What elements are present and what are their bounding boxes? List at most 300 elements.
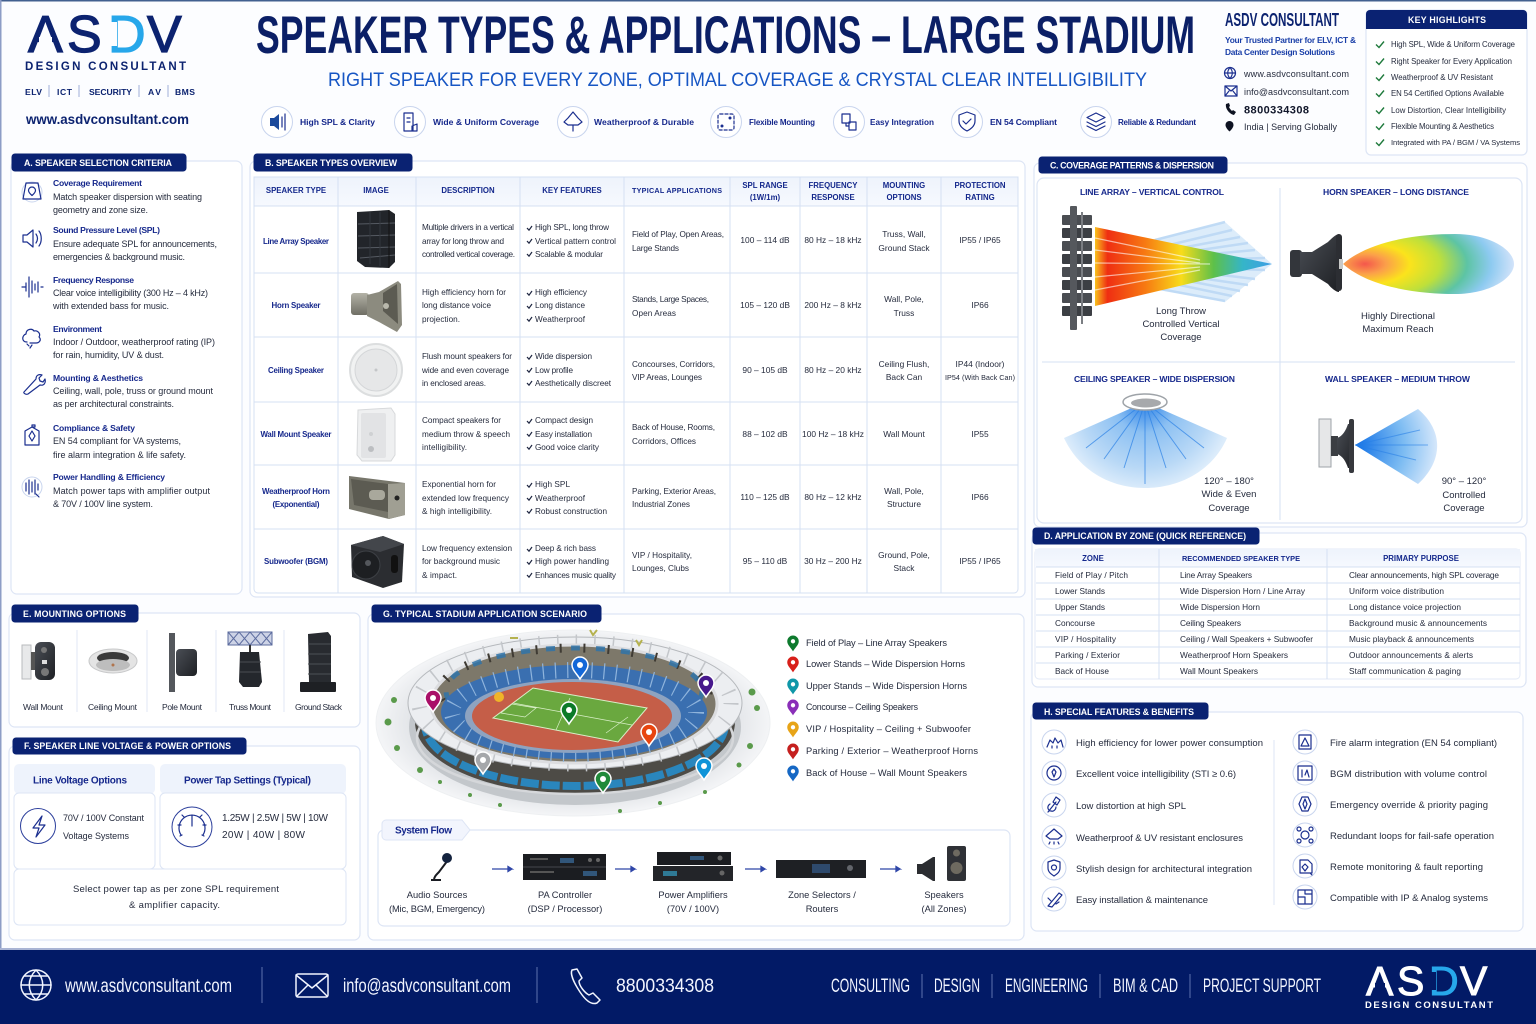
row: horn speaker: Weatherproof — [535, 315, 586, 324]
image: line array side view — [1062, 206, 1092, 330]
right feature list: Fire alarm integration (EN 54 compliant) — [1330, 738, 1497, 749]
footer: services: BIM & CAD — [1113, 976, 1178, 997]
panel: key highlights: EN 54 Certified Options Available — [1391, 89, 1504, 98]
panel: B speaker types overview — [250, 154, 1025, 597]
row: horn speaker: 105 – 120 dB — [740, 300, 790, 310]
row: line array speaker: 100 – 114 dB — [740, 235, 790, 245]
mount: truss: Truss Mount — [229, 702, 272, 712]
header logo: SECURITY — [89, 87, 132, 97]
row: weatherproof horn: Industrial Zones — [632, 500, 690, 509]
pattern: ceiling — [1064, 374, 1256, 514]
flow: zone selectors: Routers — [806, 904, 839, 914]
row: line array speaker: Large Stands — [632, 244, 679, 253]
criterion: environment: Indoor / Outdoor, weatherproof rating (IP) — [53, 337, 215, 347]
footer: services — [831, 974, 1321, 998]
sub-card: power tap — [160, 764, 346, 869]
criterion: mounting: Mounting & Aesthetics — [53, 373, 143, 383]
criterion: compliance: EN 54 compliant for VA systems, — [53, 436, 181, 446]
table: zones: VIP / Hospitality — [1055, 634, 1117, 644]
row: ceiling speaker: Aesthetically discreet — [535, 379, 612, 388]
table: zones: Uniform voice distribution — [1349, 586, 1444, 596]
row: subwoofer: Deep & rich bass — [535, 544, 596, 553]
criterion: coverage: Coverage Requirement — [53, 178, 142, 188]
table: zones: Lower Stands — [1055, 586, 1105, 596]
flow: power amplifiers — [653, 852, 733, 914]
header logo: BMS — [175, 87, 195, 97]
table: zones: Music playback & announcements — [1349, 634, 1474, 644]
row: horn speaker: High efficiency — [535, 288, 588, 297]
row: line array speaker: Scalable & modular — [535, 250, 603, 259]
panel: key highlights: Low Distortion, Clear Intelligibility — [1391, 106, 1506, 115]
header logo: ASDV — [28, 6, 182, 64]
panel: C coverage patterns: C. COVERAGE PATTERNS & DISPERSION — [1050, 160, 1214, 170]
row: ceiling speaker: 90 – 105 dB — [742, 365, 788, 375]
row: wall mount speaker: Compact design — [535, 416, 593, 425]
row: wall mount speaker: IP55 — [971, 429, 989, 439]
company contact block: 8800334308 — [1244, 104, 1309, 116]
right feature list: Emergency override & priority paging — [1330, 800, 1488, 811]
company contact block: info@asdvconsultant.com — [1244, 87, 1349, 97]
criterion: compliance — [25, 423, 186, 460]
pattern: horn: HORN SPEAKER – LONG DISTANCE — [1323, 187, 1469, 197]
header logo: DESIGN CONSULTANT — [25, 61, 186, 73]
panel: key highlights: Weatherproof & UV Resistant — [1391, 73, 1494, 82]
criterion: power — [22, 472, 210, 509]
row: weatherproof horn: Weatherproof — [535, 494, 586, 503]
row: ceiling speaker: Wide dispersion — [535, 352, 592, 361]
criterion: compliance: Compliance & Safety — [53, 423, 135, 433]
flow: power amplifiers: Power Amplifiers — [658, 890, 728, 900]
row: ceiling speaker — [268, 344, 1015, 396]
system flow — [378, 820, 1010, 926]
flow: zone selectors — [776, 860, 866, 914]
row: wall mount speaker: Corridors, Offices — [632, 437, 696, 446]
row: subwoofer: Stack — [894, 563, 915, 573]
panel: G typical stadium application: G. TYPICAL STADIUM APPLICATION SCENARIO — [383, 609, 587, 619]
footer — [0, 948, 1536, 1024]
left feature list: Excellent voice intelligibility (STI ≥ 0.6) — [1076, 769, 1236, 780]
row: ceiling speaker: VIP Areas, Lounges — [632, 373, 702, 382]
mount: ground: Ground Stack — [295, 702, 343, 712]
feature icon row: Flexible Mounting — [749, 118, 815, 127]
footer: services: DESIGN — [934, 976, 980, 997]
pattern: ceiling: Wide & Even — [1202, 489, 1256, 500]
table: zones: Ceiling Speakers — [1180, 618, 1241, 628]
row: horn speaker: Open Areas — [632, 309, 676, 318]
row: ceiling speaker: Back Can — [886, 372, 922, 382]
table: zones: Staff communication & paging — [1349, 666, 1461, 676]
row: line array speaker: Multiple drivers in a vertical — [422, 223, 514, 232]
flow: audio sources — [389, 853, 485, 914]
row: subwoofer: Ground, Pole, — [878, 550, 930, 560]
table: zones: Field of Play / Pitch — [1055, 570, 1128, 580]
table: zones: Parking / Exterior — [1055, 650, 1120, 660]
table header: KEY FEATURES — [542, 186, 602, 195]
row: horn speaker: Stands, Large Spaces, — [632, 295, 709, 304]
criterion: environment: for rain, humidity, UV & dust. — [53, 350, 164, 360]
panel: key highlights: KEY HIGHLIGHTS — [1408, 15, 1486, 25]
row: ceiling speaker: IP44 (Indoor) — [956, 359, 1005, 369]
row: weatherproof horn: Parking, Exterior Areas, — [632, 487, 716, 496]
criterion: frequency: with extended bass for music. — [52, 301, 169, 311]
legend: Lower Stands – Wide Dispersion Horns — [806, 659, 965, 669]
row: line array speaker: array for long throw and — [422, 237, 504, 246]
sub-card: line voltage — [14, 764, 155, 869]
row: line array speaker: IP55 / IP65 — [959, 235, 1001, 245]
footer: logo: DESIGN CONSULTANT — [1365, 1000, 1493, 1011]
footer: website: www.asdvconsultant.com — [64, 976, 232, 997]
row: ceiling speaker: Ceiling Flush, — [879, 359, 929, 369]
table: zones: Wide Dispersion Horn — [1180, 602, 1260, 612]
right feature list: Remote monitoring & fault reporting — [1330, 862, 1483, 873]
row: subwoofer: for background music — [422, 557, 500, 566]
arrow — [615, 866, 635, 872]
panel: D application by zone — [1032, 528, 1526, 687]
criterion: mounting — [24, 373, 213, 409]
criterion: coverage: geometry and zone size. — [53, 205, 148, 215]
row: weatherproof horn: (Exponential) — [272, 500, 320, 509]
table: zones: Ceiling / Wall Speakers + Subwoofer — [1180, 634, 1313, 644]
table: zones: Clear announcements, high SPL coverage — [1349, 570, 1499, 580]
table: zones: Line Array Speakers — [1180, 570, 1252, 580]
row: subwoofer: Enhances music quality — [535, 571, 617, 580]
row: ceiling speaker: 80 Hz – 20 kHz — [804, 365, 862, 375]
footer: phone: 8800334308 — [616, 976, 714, 997]
table: zones: Long distance voice projection — [1349, 602, 1461, 612]
row: wall mount speaker: medium throw & speech — [422, 430, 510, 439]
row: line array speaker: controlled vertical coverage. — [422, 250, 515, 259]
flow: speakers: (All Zones) — [922, 904, 966, 914]
company contact block: ASDV CONSULTANT — [1225, 10, 1339, 30]
footer: phone — [571, 969, 714, 1004]
legend — [787, 636, 978, 781]
row: line array speaker: Field of Play, Open Areas, — [632, 230, 724, 239]
table header: OPTIONS — [886, 193, 922, 202]
legend: VIP / Hospitality – Ceiling + Subwoofer — [806, 724, 971, 734]
row: weatherproof horn: Robust construction — [535, 507, 607, 516]
row: weatherproof horn: Structure — [887, 499, 921, 509]
pattern: ceiling: CEILING SPEAKER – WIDE DISPERSION — [1074, 374, 1235, 384]
system flow: System Flow — [395, 826, 452, 836]
row: ceiling speaker: Ceiling Speaker — [268, 366, 324, 375]
criterion: power: Power Handling & Efficiency — [53, 472, 165, 482]
row: ceiling speaker: Concourses, Corridors, — [632, 360, 715, 369]
pattern: wall: Controlled — [1442, 490, 1486, 501]
panel: key highlights: High SPL, Wide & Uniform Coverage — [1391, 40, 1515, 49]
mount: ceiling: Ceiling Mount — [88, 702, 138, 712]
panel: key highlights: Right Speaker for Every Application — [1391, 57, 1512, 66]
criterion: environment — [23, 324, 215, 360]
criterion: SPL: Sound Pressure Level (SPL) — [53, 225, 160, 235]
illustration: stadium — [376, 630, 770, 816]
header logo: ELV — [25, 87, 42, 97]
panel: C coverage patterns — [1034, 157, 1527, 527]
company contact block: Your Trusted Partner for ELV, ICT & — [1225, 35, 1356, 45]
company contact block: Data Center Design Solutions — [1225, 47, 1335, 57]
pattern: line array — [1062, 187, 1272, 343]
pattern: wall: WALL SPEAKER – MEDIUM THROW — [1325, 374, 1471, 384]
arrow — [745, 866, 765, 872]
row: line array speaker: Vertical pattern control — [535, 237, 616, 246]
company contact block: www.asdvconsultant.com — [1243, 69, 1349, 79]
sub-card: line voltage: Voltage Systems — [63, 831, 130, 841]
table header: SPL RANGE — [742, 181, 788, 190]
criterion: mounting: as per architectural constraints. — [53, 399, 174, 409]
pattern: line array: Long Throw — [1156, 306, 1206, 317]
row: ceiling speaker: in enclosed areas. — [422, 379, 486, 388]
feature icon row: Reliable & Redundant — [1118, 118, 1196, 127]
criterion: frequency — [22, 275, 208, 311]
row: weatherproof horn: extended low frequency — [422, 494, 510, 503]
row: weatherproof horn: Wall, Pole, — [884, 486, 924, 496]
flow: PA controller: (DSP / Processor) — [528, 904, 602, 914]
sub-card: power tap: 20W | 40W | 80W — [222, 830, 306, 841]
left feature list: Easy installation & maintenance — [1076, 895, 1208, 906]
flow: speakers — [917, 846, 966, 914]
row: horn speaker: projection. — [422, 315, 460, 324]
pattern: ceiling: Coverage — [1208, 503, 1250, 514]
legend: Back of House – Wall Mount Speakers — [806, 768, 967, 778]
right feature list — [1293, 730, 1497, 909]
pattern: horn: Highly Directional — [1361, 311, 1435, 322]
table header: TYPICAL APPLICATIONS — [632, 186, 722, 195]
legend: Parking / Exterior – Weatherproof Horns — [806, 746, 978, 756]
criterion: coverage: Match speaker dispersion with seating — [53, 192, 202, 202]
pins — [425, 657, 714, 793]
row: ceiling speaker: Flush mount speakers for — [422, 352, 512, 361]
panel: E mounting options: E. MOUNTING OPTIONS — [23, 609, 126, 619]
panel: A speaker selection criteria — [11, 154, 242, 594]
mount: ceiling — [88, 649, 138, 712]
feature icon row: EN 54 Compliant — [990, 117, 1057, 127]
row: line array speaker: Line Array Speaker — [263, 237, 329, 246]
mount: pole: Pole Mount — [162, 702, 203, 712]
row: weatherproof horn: Exponential horn for — [422, 480, 496, 489]
row: horn speaker: long distance voice — [422, 301, 491, 310]
note: & amplifier capacity. — [129, 900, 220, 911]
row: line array speaker: 80 Hz – 18 kHz — [804, 235, 862, 245]
right feature list: Redundant loops for fail-safe operation — [1330, 831, 1494, 842]
table header: FREQUENCY — [809, 181, 858, 190]
row: horn speaker: Long distance — [535, 301, 585, 310]
table: zones — [1035, 549, 1520, 679]
image: exponential horn — [349, 476, 405, 519]
image: ceiling speaker — [350, 344, 402, 396]
pattern: wall — [1319, 374, 1486, 514]
row: subwoofer: High power handling — [535, 557, 609, 566]
row: wall mount speaker: intelligibility. — [422, 443, 467, 452]
mount: truss — [228, 632, 272, 712]
image: ceiling ring — [1123, 394, 1167, 410]
criterion: compliance: fire alarm integration & life safety. — [53, 450, 186, 460]
row: weatherproof horn: 80 Hz – 12 kHz — [804, 492, 862, 502]
row: line array speaker: Ground Stack — [878, 243, 930, 253]
footer: website — [21, 970, 232, 1000]
table: zones: Concourse — [1055, 618, 1095, 628]
row: wall mount speaker: Back of House, Rooms, — [632, 423, 715, 432]
flow: audio sources: Audio Sources — [407, 890, 468, 900]
row: horn speaker: IP66 — [971, 300, 989, 310]
criterion: coverage — [22, 178, 202, 215]
legend: Upper Stands – Wide Dispersion Horns — [806, 681, 967, 691]
flow: power amplifiers: (70V / 100V) — [667, 904, 719, 914]
image: subwoofer — [351, 536, 404, 588]
table: zones: Wide Dispersion Horn / Line Array — [1180, 586, 1306, 596]
feature icon row: Easy Integration — [870, 118, 934, 127]
footer: services: ENGINEERING — [1005, 976, 1088, 997]
note: Select power tap as per zone SPL requirement — [73, 884, 279, 895]
flow: PA controller — [523, 854, 606, 914]
flow: speakers: Speakers — [924, 890, 964, 900]
pattern: ceiling: 120° – 180° — [1204, 476, 1254, 487]
row: line array speaker: High SPL, long throw — [535, 223, 609, 232]
image: horn — [351, 281, 402, 332]
row: ceiling speaker: wide and even coverage — [421, 366, 509, 375]
footer: email: info@asdvconsultant.com — [343, 976, 511, 997]
criterion: power: Match power taps with amplifier output — [53, 486, 210, 496]
panel: B speaker types overview: B. SPEAKER TYPES OVERVIEW — [265, 158, 398, 168]
row: horn speaker: Wall, Pole, — [884, 294, 924, 304]
table: speaker types — [254, 177, 1018, 593]
table: zones: Outdoor announcements & alerts — [1349, 650, 1473, 660]
table: zones: Back of House — [1055, 666, 1109, 676]
flow: zone selectors: Zone Selectors / — [788, 890, 856, 900]
row: subwoofer: Lounges, Clubs — [632, 564, 689, 573]
pattern: line array: Controlled Vertical — [1142, 319, 1220, 330]
row: subwoofer: Low frequency extension — [422, 544, 512, 553]
image: wall horn — [1319, 419, 1354, 473]
panel: D application by zone: D. APPLICATION BY ZONE (QUICK REFERENCE) — [1044, 531, 1246, 541]
panel: F line voltage and power: F. SPEAKER LINE VOLTAGE & POWER OPTIONS — [24, 741, 231, 751]
table: zones: PRIMARY PURPOSE — [1383, 554, 1459, 563]
row: wall mount speaker: Compact speakers for — [422, 416, 501, 425]
row: wall mount speaker: Good voice clarity — [535, 443, 600, 452]
row: subwoofer: & impact. — [422, 571, 457, 580]
table header: PROTECTION — [954, 181, 1006, 190]
right feature list: BGM distribution with volume control — [1330, 769, 1487, 780]
table header: IMAGE — [363, 186, 389, 195]
table: zones: Background music & announcements — [1349, 618, 1487, 628]
note — [14, 869, 346, 925]
company contact block: India | Serving Globally — [1244, 122, 1338, 132]
criterion: power: & 70V / 100V line system. — [53, 499, 153, 509]
panel: H special features: H. SPECIAL FEATURES & BENEFITS — [1044, 707, 1194, 717]
row: horn speaker: Truss — [894, 308, 914, 318]
table: zones: Weatherproof Horn Speakers — [1180, 650, 1288, 660]
panel: key highlights: Integrated with PA / BGM / VA Systems — [1391, 138, 1520, 147]
flow: PA controller: PA Controller — [538, 890, 592, 900]
row: subwoofer: IP55 / IP65 — [959, 556, 1001, 566]
mount: wall: Wall Mount — [23, 702, 64, 712]
row: subwoofer: VIP / Hospitality, — [632, 551, 692, 560]
left feature list: High efficiency for lower power consumption — [1076, 738, 1263, 749]
left feature list: Weatherproof & UV resistant enclosures — [1076, 833, 1243, 844]
pattern: line array: Coverage — [1160, 332, 1202, 343]
table header: (1W/1m) — [750, 193, 781, 202]
feature icon row — [262, 106, 1196, 138]
left feature list: Low distortion at high SPL — [1076, 801, 1186, 812]
row: weatherproof horn — [262, 476, 989, 519]
subtitle: RIGHT SPEAKER FOR EVERY ZONE, OPTIMAL COVERAGE & CRYSTAL CLEAR INTELLIGIBILITY — [328, 69, 1147, 91]
row: line array speaker: Truss, Wall, — [882, 229, 926, 239]
pattern: wall: Coverage — [1443, 503, 1485, 514]
pattern: horn: Maximum Reach — [1362, 324, 1434, 335]
mount: pole — [162, 633, 203, 712]
table header — [266, 181, 1006, 202]
criterion: mounting: Ceiling, wall, pole, truss or ground mount — [53, 386, 213, 396]
panel: A speaker selection criteria: A. SPEAKER SELECTION CRITERIA — [24, 158, 173, 168]
panel: key highlights: Flexible Mounting & Aesthetics — [1391, 122, 1494, 131]
row: horn speaker — [272, 281, 989, 332]
sub-card: line voltage: Line Voltage Options — [33, 776, 127, 786]
table header: SPEAKER TYPE — [266, 186, 326, 195]
criterion: frequency: Frequency Response — [53, 275, 134, 285]
left feature list: Stylish design for architectural integration — [1076, 864, 1252, 875]
image: line array — [357, 210, 395, 268]
row: weatherproof horn: 110 – 125 dB — [740, 492, 790, 502]
row: weatherproof horn: High SPL — [535, 480, 570, 489]
header logo: AV — [148, 87, 161, 97]
row: wall mount speaker: Wall Mount — [883, 429, 925, 439]
row: horn speaker: Horn Speaker — [272, 301, 320, 310]
footer: services: PROJECT SUPPORT — [1203, 976, 1321, 997]
table: zones: Upper Stands — [1055, 602, 1105, 612]
criterion: SPL: emergencies & background music. — [53, 252, 185, 262]
footer: email — [296, 974, 511, 997]
header logo: ICT — [57, 87, 73, 97]
footer: services: CONSULTING — [831, 976, 910, 997]
row: horn speaker: 200 Hz – 8 kHz — [804, 300, 862, 310]
row: ceiling speaker: IP54 (With Back Can) — [945, 373, 1015, 382]
row: wall mount speaker: 88 – 102 dB — [742, 429, 788, 439]
header logo — [25, 6, 195, 127]
mount: ground — [295, 632, 343, 712]
row: line array speaker — [263, 210, 1001, 268]
row: wall mount speaker: Wall Mount Speaker — [260, 430, 332, 439]
pattern: line array: LINE ARRAY – VERTICAL CONTROL — [1080, 187, 1224, 197]
row: subwoofer — [264, 536, 1001, 588]
row: wall mount speaker: 100 Hz – 18 kHz — [802, 429, 864, 439]
table header: DESCRIPTION — [441, 186, 495, 195]
pattern: wall: 90° – 120° — [1442, 476, 1486, 487]
left feature list — [1042, 730, 1263, 911]
panel: F line voltage and power — [9, 738, 360, 940]
pattern: horn — [1290, 187, 1514, 335]
legend: Field of Play – Line Array Speakers — [806, 638, 947, 648]
sub-card: power tap: Power Tap Settings (Typical) — [184, 776, 311, 786]
panel: H special features — [1031, 703, 1523, 931]
row: ceiling speaker: Low profile — [535, 366, 573, 375]
legend: Concourse – Ceiling Speakers — [806, 702, 919, 712]
panel: key highlights — [1366, 10, 1527, 155]
table header: MOUNTING — [883, 181, 925, 190]
sub-card: power tap: 1.25W | 2.5W | 5W | 10W — [222, 813, 329, 824]
criterion: SPL — [23, 225, 217, 262]
arrow — [492, 866, 512, 872]
criterion: environment: Environment — [53, 324, 102, 334]
row: weatherproof horn: Weatherproof Horn — [262, 487, 330, 496]
table header: RESPONSE — [811, 193, 855, 202]
feature icon row: Wide & Uniform Coverage — [433, 117, 539, 127]
panel: E mounting options — [9, 605, 360, 727]
feature icon row: Weatherproof & Durable — [594, 117, 694, 127]
arrow — [880, 866, 900, 872]
criterion: SPL: Ensure adequate SPL for announcements, — [53, 239, 217, 249]
criterion: frequency: Clear voice intelligibility (300 Hz – 4 kHz) — [53, 288, 208, 298]
row: subwoofer: 95 – 110 dB — [743, 556, 788, 566]
row: wall mount speaker: Easy installation — [535, 430, 592, 439]
row: weatherproof horn: & high intelligibility. — [422, 507, 492, 516]
